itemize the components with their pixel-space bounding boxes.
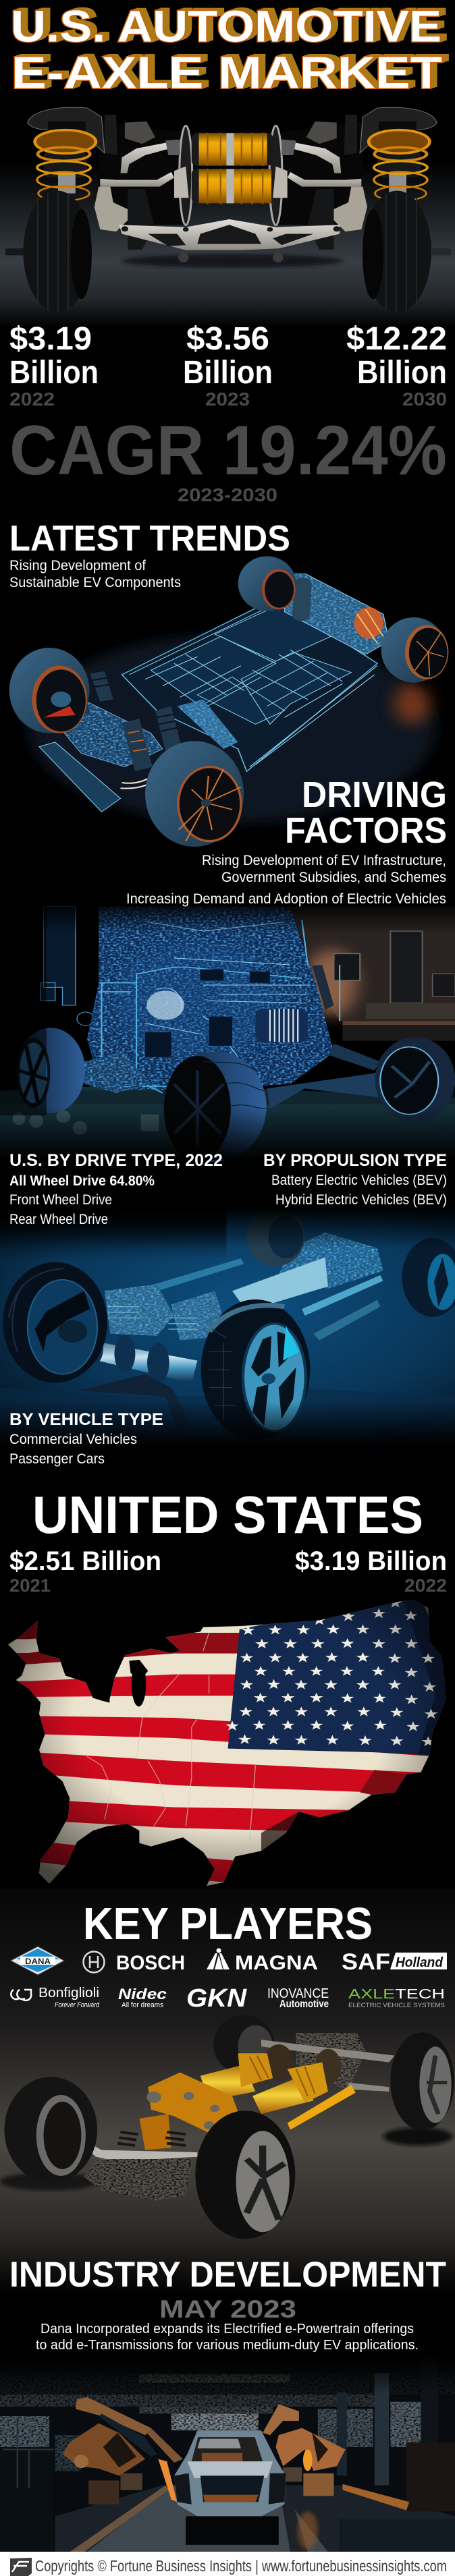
segment: vehicle type: BY VEHICLE TYPE bbox=[9, 1410, 163, 1429]
logo: Nidec: All for dreams bbox=[122, 2001, 163, 2009]
logo: Dana bbox=[11, 1947, 64, 1975]
heading: industry development: Dana Incorporated expands its Electrified e-Powertrain offerings bbox=[41, 2322, 414, 2336]
key players section background bbox=[0, 1889, 455, 2294]
heading: industry development: MAY 2023 bbox=[159, 2295, 296, 2323]
segment: vehicle type bbox=[9, 1410, 163, 1467]
title: U.S. AUTOMOTIVE bbox=[11, 1, 441, 51]
segment: vehicle type: Passenger Cars bbox=[9, 1451, 105, 1467]
logo: Bonfiglioli: Forever Forward bbox=[55, 2001, 100, 2009]
logo: Axletech: ELECTRIC VEHICLE SYSTEMS bbox=[348, 2002, 445, 2009]
stat: US 2021 bbox=[9, 1546, 161, 1596]
heading: driving factors: Rising Development of EV Infrastructure, bbox=[202, 853, 446, 868]
logo: SAF Holland: Holland bbox=[396, 1955, 444, 1970]
heading: latest trends bbox=[9, 518, 290, 590]
logo: Inovance Automotive: INOVANCE bbox=[267, 1986, 329, 2001]
title: E-AXLE MARKET bbox=[11, 47, 442, 99]
logo: Fortune Business Insights bbox=[10, 2558, 32, 2576]
logo: Magna bbox=[207, 1949, 318, 1974]
segment: drive type: All Wheel Drive 64.80% bbox=[9, 1173, 155, 1189]
heading: industry development: to add e-Transmissions for various medium-duty EV applications. bbox=[36, 2338, 419, 2353]
segment: drive type: Rear Wheel Drive bbox=[9, 1212, 108, 1227]
stat: 2030 value: 2030 bbox=[402, 389, 447, 410]
heading: driving factors: Government Subsidies, and Schemes bbox=[221, 870, 446, 885]
illustration: blue engine in workshop bbox=[0, 902, 455, 1162]
logo: SAF Holland: SAF bbox=[342, 1949, 390, 1975]
heading: driving factors: Increasing Demand and Adoption of Electric Vehicles bbox=[126, 891, 446, 907]
heading: united states: UNITED STATES bbox=[32, 1485, 423, 1544]
logo: Nidec: Nidec bbox=[118, 1986, 167, 2003]
stat: 2023 value: $3.56 bbox=[186, 321, 269, 357]
heading: latest trends: LATEST TRENDS bbox=[9, 518, 290, 559]
logo: GKN: GKN bbox=[186, 1984, 248, 2013]
robot arm right bbox=[263, 2404, 346, 2496]
logo: Nidec bbox=[118, 1986, 167, 2009]
robot arm left bbox=[62, 2397, 183, 2504]
stat: 2023 value: Billion bbox=[183, 355, 273, 391]
stat: 2023 value: 2023 bbox=[205, 389, 250, 410]
stat: 2022 value: $3.19 bbox=[9, 321, 92, 357]
segment: drive type bbox=[9, 1151, 223, 1227]
segment: vehicle type: Commercial Vehicles bbox=[9, 1432, 137, 1447]
illustration: car factory robots bbox=[0, 2354, 455, 2552]
logo: Bosch: BOSCH bbox=[116, 1952, 185, 1974]
stat: 2030 value: $12.22 bbox=[346, 321, 447, 357]
logo: Axletech bbox=[348, 1987, 445, 2009]
heading: latest trends: Rising Development of bbox=[9, 558, 146, 573]
stat: US 2022: $3.19 Billion bbox=[295, 1546, 447, 1576]
logo: Inovance Automotive bbox=[267, 1986, 329, 2010]
segment: drive type: U.S. BY DRIVE TYPE, 2022 bbox=[9, 1151, 223, 1170]
heading: key players: KEY PLAYERS bbox=[83, 1899, 373, 1949]
illustration: blue x-ray EV chassis bbox=[9, 556, 448, 847]
stat: 2023 value bbox=[183, 321, 273, 410]
stat: 2022 value bbox=[9, 321, 99, 410]
stat: US 2022 bbox=[295, 1546, 447, 1596]
heading: driving factors: DRIVING bbox=[302, 775, 447, 815]
logo: Axletech: AXLE TECH bbox=[348, 1987, 445, 2002]
US map filled with flag bbox=[8, 1600, 446, 1886]
logos: key players bbox=[11, 1947, 447, 2013]
footer bar bbox=[0, 2552, 455, 2576]
illustration: blue drivetrain bbox=[0, 1208, 455, 1446]
stat: 2022 value: 2022 bbox=[9, 389, 55, 410]
stat: 2030 value: Billion bbox=[357, 355, 447, 391]
illustration: golden e-axle car chassis bbox=[0, 2015, 454, 2239]
car body bbox=[174, 2430, 286, 2545]
title bbox=[11, 1, 442, 99]
logo: Bonfiglioli bbox=[11, 1986, 100, 2009]
heading: driving factors: FACTORS bbox=[285, 810, 447, 851]
heading: driving factors bbox=[126, 775, 447, 907]
stat: US 2021: 2021 bbox=[9, 1575, 51, 1596]
logo: Bonfiglioli: Bonfiglioli bbox=[38, 1986, 99, 2000]
logo: Magna: MAGNA bbox=[235, 1952, 318, 1974]
stat: 2030 value bbox=[346, 321, 447, 410]
logo: Bosch bbox=[84, 1951, 185, 1974]
heading: industry development bbox=[9, 2255, 446, 2353]
segment: propulsion type: BY PROPULSION TYPE bbox=[263, 1151, 447, 1170]
hero illustration: e-axle assembly bbox=[0, 107, 455, 327]
stat: 2022 value: Billion bbox=[9, 355, 99, 391]
heading: latest trends: Sustainable EV Components bbox=[9, 575, 181, 590]
logo: SAF Holland bbox=[342, 1949, 447, 1975]
logo: Dana: DANA bbox=[25, 1957, 51, 1966]
segment: propulsion type bbox=[263, 1151, 447, 1208]
stat: US 2022: 2022 bbox=[404, 1575, 447, 1596]
stat: US 2021: $2.51 Billion bbox=[9, 1546, 161, 1576]
CAGR figure: 2023-2030 bbox=[178, 484, 277, 505]
segment: drive type: Front Wheel Drive bbox=[9, 1192, 112, 1208]
logo: Inovance Automotive: Automotive bbox=[279, 1998, 329, 2010]
